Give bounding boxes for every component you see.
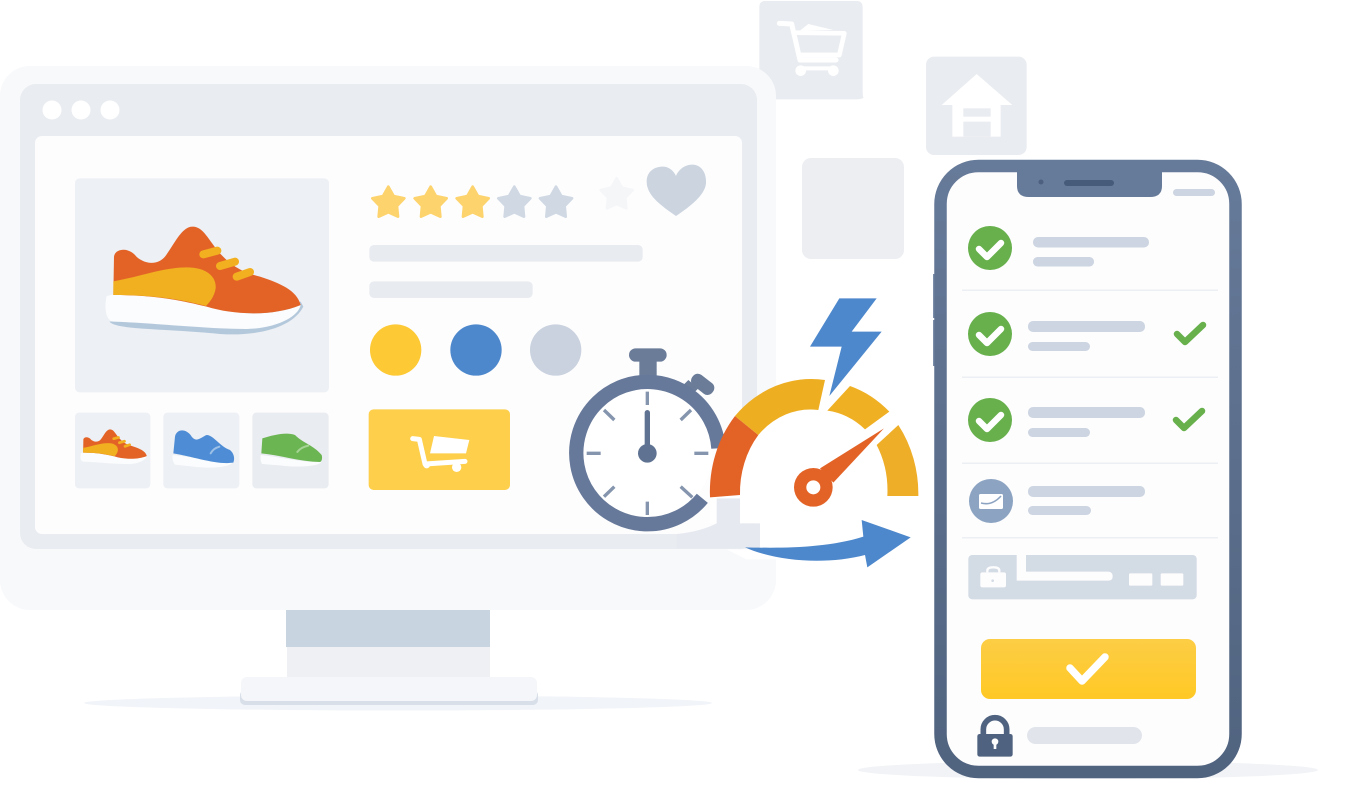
confirm button [981,639,1196,699]
product title placeholder [369,245,643,262]
status pill [1173,189,1215,196]
desktop monitor [0,66,776,705]
floating blank tile [802,158,904,259]
icon: floating house tile [926,57,1027,155]
browser frame [20,84,757,549]
colour swatch: grey [530,324,581,376]
phone side buttons [933,274,936,366]
phone body [940,166,1236,772]
gauge stand [677,498,760,548]
phone notch [1017,168,1162,197]
checkout row 2 [968,312,1203,356]
white patch under arrow [727,549,780,559]
notch camera [1038,180,1044,184]
faint star [601,178,633,208]
thumbnail: orange shoe [75,413,150,488]
icon: floating cart tile [759,1,864,99]
add to cart button [369,409,510,490]
product details column [369,165,706,490]
checkout row 4 [969,479,1145,523]
product image card with main shoe [75,178,329,392]
product subtitle placeholder [369,281,533,298]
secure note placeholder [1027,727,1142,744]
colour swatch: yellow [370,324,421,376]
browser window dots [42,100,120,120]
monitor ground shadow [84,696,712,710]
star rating [372,187,572,217]
monitor stand neck [286,610,490,678]
notch speaker [1064,180,1114,186]
white mask behind gauge [710,387,918,549]
monitor bezel [0,66,776,610]
phone ground shadow [858,761,1318,779]
icon: lightning bolt [810,298,882,396]
speed group: stopwatch, gauge, bolt, arrow [571,298,918,567]
arrow to phone [745,520,911,567]
browser page [35,136,742,534]
product thumbnails [75,413,329,488]
icon: padlock [977,718,1013,757]
checkout row 1 [968,226,1149,270]
main shoe [106,227,303,334]
speedometer gauge [710,379,918,507]
checkout row 3 [968,398,1202,442]
icon: heart [647,165,706,216]
colour swatch: blue [450,324,502,376]
smartphone checkout [933,166,1236,772]
thumbnail: blue shoe [163,413,239,488]
thumbnail: green shoe [252,413,329,488]
payment card field [968,555,1197,599]
monitor stand base [240,677,538,705]
stopwatch [571,348,723,529]
